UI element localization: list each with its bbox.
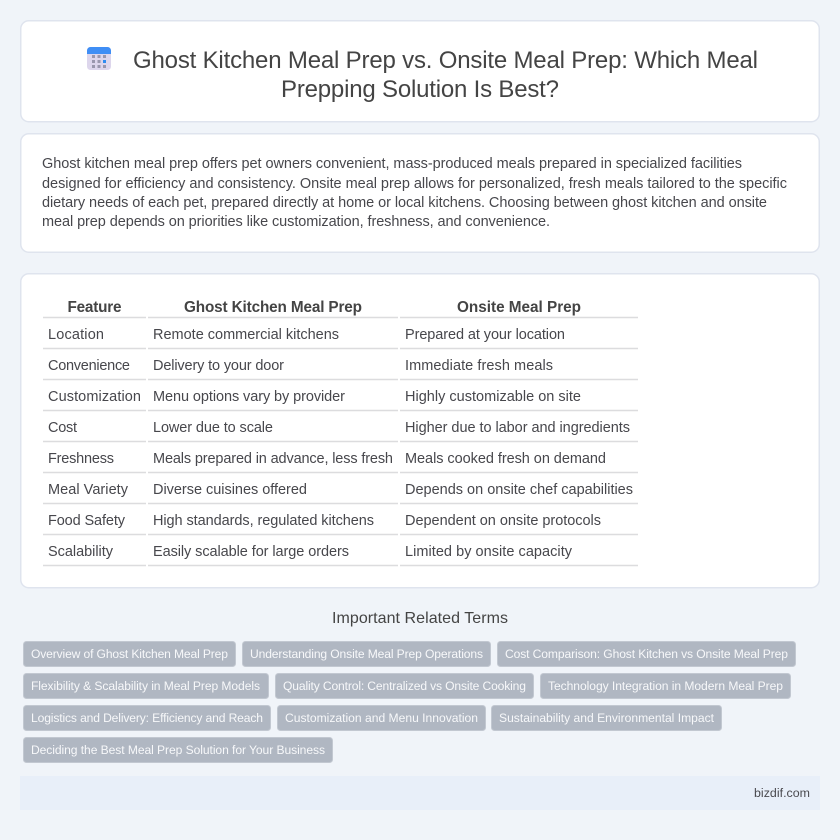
chip: cost comparison xyxy=(498,642,796,666)
panel: introduction paragraph xyxy=(21,134,819,252)
title: Ghost Kitchen Meal Prep vs. Onsite Meal Prep: Which Meal xyxy=(133,47,758,74)
text block: introduction xyxy=(42,156,787,230)
text block: introduction: designed for efficiency and consistency. Onsite meal prep allows for personalized, fresh meals tailored to the specific xyxy=(42,176,787,192)
title xyxy=(133,47,758,103)
table row: Customization: Menu options vary by provider xyxy=(153,389,345,405)
table row: Meal Variety: Diverse cuisines offered xyxy=(153,482,307,498)
chip: logistics: Logistics and Delivery: Efficiency and Reach xyxy=(31,711,263,725)
footer xyxy=(20,776,820,810)
table row: Food Safety xyxy=(48,513,601,529)
table row: Convenience xyxy=(48,358,553,374)
table row: Scalability: Scalability xyxy=(48,544,114,560)
table row: Convenience: Convenience xyxy=(48,358,130,374)
table header: Feature xyxy=(68,299,122,316)
table row: Freshness: Meals prepared in advance, less fresh xyxy=(153,451,393,467)
chip: overview: Overview of Ghost Kitchen Meal Prep xyxy=(31,647,228,661)
chip: deciding: Deciding the Best Meal Prep Solution for Your Business xyxy=(31,743,325,757)
icon: calendar xyxy=(87,47,111,70)
table row: Cost xyxy=(48,420,630,436)
chip: flexibility xyxy=(24,674,268,698)
chip: quality control xyxy=(276,674,534,698)
table row: Cost: Higher due to labor and ingredients xyxy=(405,420,630,436)
text block: introduction: meal prep depends on priorities like customization, freshness, and convenience. xyxy=(42,214,550,230)
table row: Food Safety: Food Safety xyxy=(48,513,126,529)
chip: sustainability xyxy=(492,706,722,730)
chip: sustainability: Sustainability and Environmental Impact xyxy=(499,711,715,725)
chip: technology xyxy=(540,674,790,698)
table header: Onsite Meal Prep xyxy=(457,299,581,316)
chip: flexibility: Flexibility & Scalability in Meal Prep Models xyxy=(31,679,260,693)
table row: Food Safety: High standards, regulated kitchens xyxy=(153,513,374,529)
related terms chips xyxy=(24,642,796,762)
table row: Location: Remote commercial kitchens xyxy=(153,327,339,343)
chip: onsite operations xyxy=(242,642,490,666)
panel: header card xyxy=(21,21,819,122)
table row: Scalability: Easily scalable for large orders xyxy=(153,544,349,560)
table row: Freshness: Freshness xyxy=(48,451,114,467)
chip: quality control: Quality Control: Centralized vs Onsite Cooking xyxy=(283,679,526,693)
table row: Location: Prepared at your location xyxy=(405,327,565,343)
table row: Convenience: Immediate fresh meals xyxy=(405,358,553,374)
table row: Scalability xyxy=(48,544,573,560)
table row: Convenience: Delivery to your door xyxy=(153,358,284,374)
table row: Freshness: Meals cooked fresh on demand xyxy=(405,451,606,467)
chip: overview xyxy=(24,642,236,666)
table row: Location: Location xyxy=(48,327,104,343)
text block: introduction: Ghost kitchen meal prep offers pet owners convenient, mass-produced meals prepared in specialized facilities xyxy=(42,156,742,172)
table row: Food Safety: Dependent on onsite protocols xyxy=(405,513,601,529)
table row: Meal Variety: Depends on onsite chef capabilities xyxy=(405,482,633,498)
table row: Location xyxy=(48,327,565,343)
table row: Customization xyxy=(48,389,581,405)
footer: source: bizdif.com xyxy=(754,786,810,800)
chip: customization xyxy=(278,706,486,730)
chip: customization: Customization and Menu Innovation xyxy=(285,711,478,725)
heading: related terms: Important Related Terms xyxy=(332,610,508,627)
text block: introduction: dietary needs of each pet, prepared directly at home or local kitchens. Choosing between ghost kitchen and onsite xyxy=(42,195,767,211)
table row: Customization: Customization xyxy=(48,389,141,405)
table row: Meal Variety xyxy=(48,482,633,498)
chip: cost comparison: Cost Comparison: Ghost Kitchen vs Onsite Meal Prep xyxy=(505,647,788,661)
table row: Customization: Highly customizable on site xyxy=(405,389,581,405)
chip: logistics xyxy=(24,706,270,730)
table header xyxy=(68,299,581,316)
table row: Scalability: Limited by onsite capacity xyxy=(405,544,573,560)
table row: Meal Variety: Meal Variety xyxy=(48,482,129,498)
table row: Cost: Lower due to scale xyxy=(153,420,273,436)
title: Prepping Solution Is Best? xyxy=(281,76,559,103)
panel: comparison table xyxy=(21,274,819,588)
table row: Cost: Cost xyxy=(48,420,77,436)
chip: deciding xyxy=(24,738,332,762)
chip: technology: Technology Integration in Modern Meal Prep xyxy=(548,679,783,693)
table header: Ghost Kitchen Meal Prep xyxy=(184,299,362,316)
table row: Freshness xyxy=(48,451,606,467)
chip: onsite operations: Understanding Onsite Meal Prep Operations xyxy=(250,647,483,661)
